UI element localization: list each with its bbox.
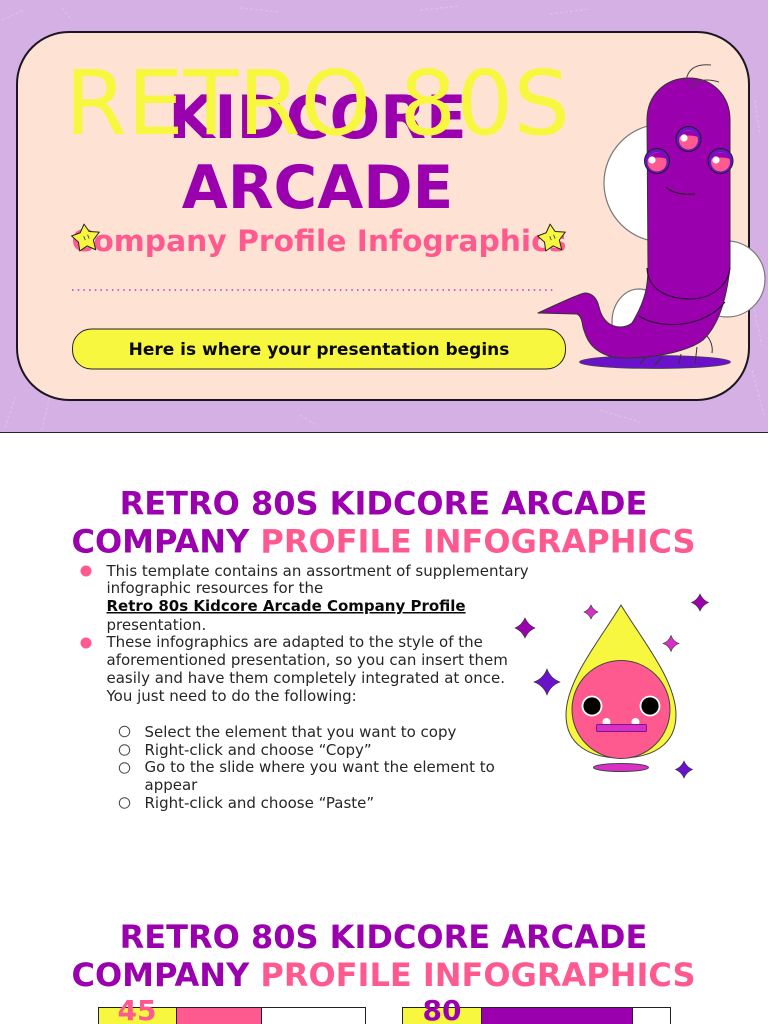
paragraph 2 <box>106 633 508 705</box>
legs <box>640 335 712 365</box>
heading: section 2: COMPANY PROFILE INFOGRAPHICS <box>71 522 696 560</box>
paragraph 1 <box>106 562 529 634</box>
title: kidcore arcade: KIDCORE <box>168 84 467 153</box>
overlapping title: retro 80s: RETRO 80S <box>65 52 570 156</box>
creature: purple three-eyed monster <box>538 65 765 368</box>
paragraph 2: aforementioned presentation, so you can insert them <box>106 651 508 669</box>
eyes <box>582 696 602 716</box>
yellow drop <box>566 605 676 758</box>
bar chart: 45 <box>98 994 366 1024</box>
star left <box>70 222 102 253</box>
sub-list steps: appear <box>144 776 198 794</box>
sparkles <box>515 594 708 778</box>
paragraph 2: You just need to do the following: <box>106 687 357 705</box>
title card <box>17 32 749 400</box>
paragraph 2: easily and have them completely integrated at once. <box>106 669 505 687</box>
subtitle: Company Profile Infographics <box>72 224 566 259</box>
paragraph 1: infographic resources for the <box>106 579 323 597</box>
paragraph 2: These infographics are adapted to the style of the <box>106 633 483 651</box>
paragraph 1: Retro 80s Kidcore Arcade Company Profile <box>106 597 466 615</box>
eyes <box>644 126 733 174</box>
sub-list steps: Right-click and choose “Copy” <box>144 741 372 759</box>
heading: section 2: RETRO 80S KIDCORE ARCADE <box>120 484 647 522</box>
heading: section 3 <box>71 918 696 994</box>
heading: section 2 <box>71 484 696 560</box>
mouth <box>666 187 695 194</box>
hair <box>686 65 719 88</box>
presentation pill button <box>72 329 566 369</box>
character: pink drop monster <box>566 605 676 772</box>
title: kidcore arcade: ARCADE <box>182 154 453 223</box>
bar chart: 80 <box>402 994 670 1024</box>
presentation pill button: Here is where your presentation begins <box>129 340 509 360</box>
bullet 2 <box>80 638 92 648</box>
shadow <box>594 764 648 772</box>
dotted divider <box>72 289 556 291</box>
teeth <box>602 718 610 726</box>
white background circles <box>604 124 765 355</box>
paragraph 1: This template contains an assortment of supplementary <box>106 562 529 580</box>
mouth <box>596 724 646 732</box>
heading: section 3: RETRO 80S KIDCORE ARCADE <box>120 918 647 956</box>
pink face <box>572 660 670 758</box>
bullet 1 <box>80 566 92 576</box>
sub-list steps: Right-click and choose “Paste” <box>144 794 374 812</box>
sub-list steps <box>119 723 495 812</box>
sub-list steps: Go to the slide where you want the element to <box>144 758 495 776</box>
body and tail <box>538 78 730 358</box>
paragraph 1: presentation. <box>106 616 206 634</box>
shadow <box>580 356 730 368</box>
title: kidcore arcade <box>168 84 467 223</box>
sub-list steps: Select the element that you want to copy <box>144 723 456 741</box>
heading: section 3: COMPANY PROFILE INFOGRAPHICS <box>71 956 696 994</box>
text block: instructions <box>80 562 529 812</box>
slide 1 background <box>0 0 768 433</box>
belly lines <box>639 268 730 325</box>
star right <box>536 222 568 253</box>
